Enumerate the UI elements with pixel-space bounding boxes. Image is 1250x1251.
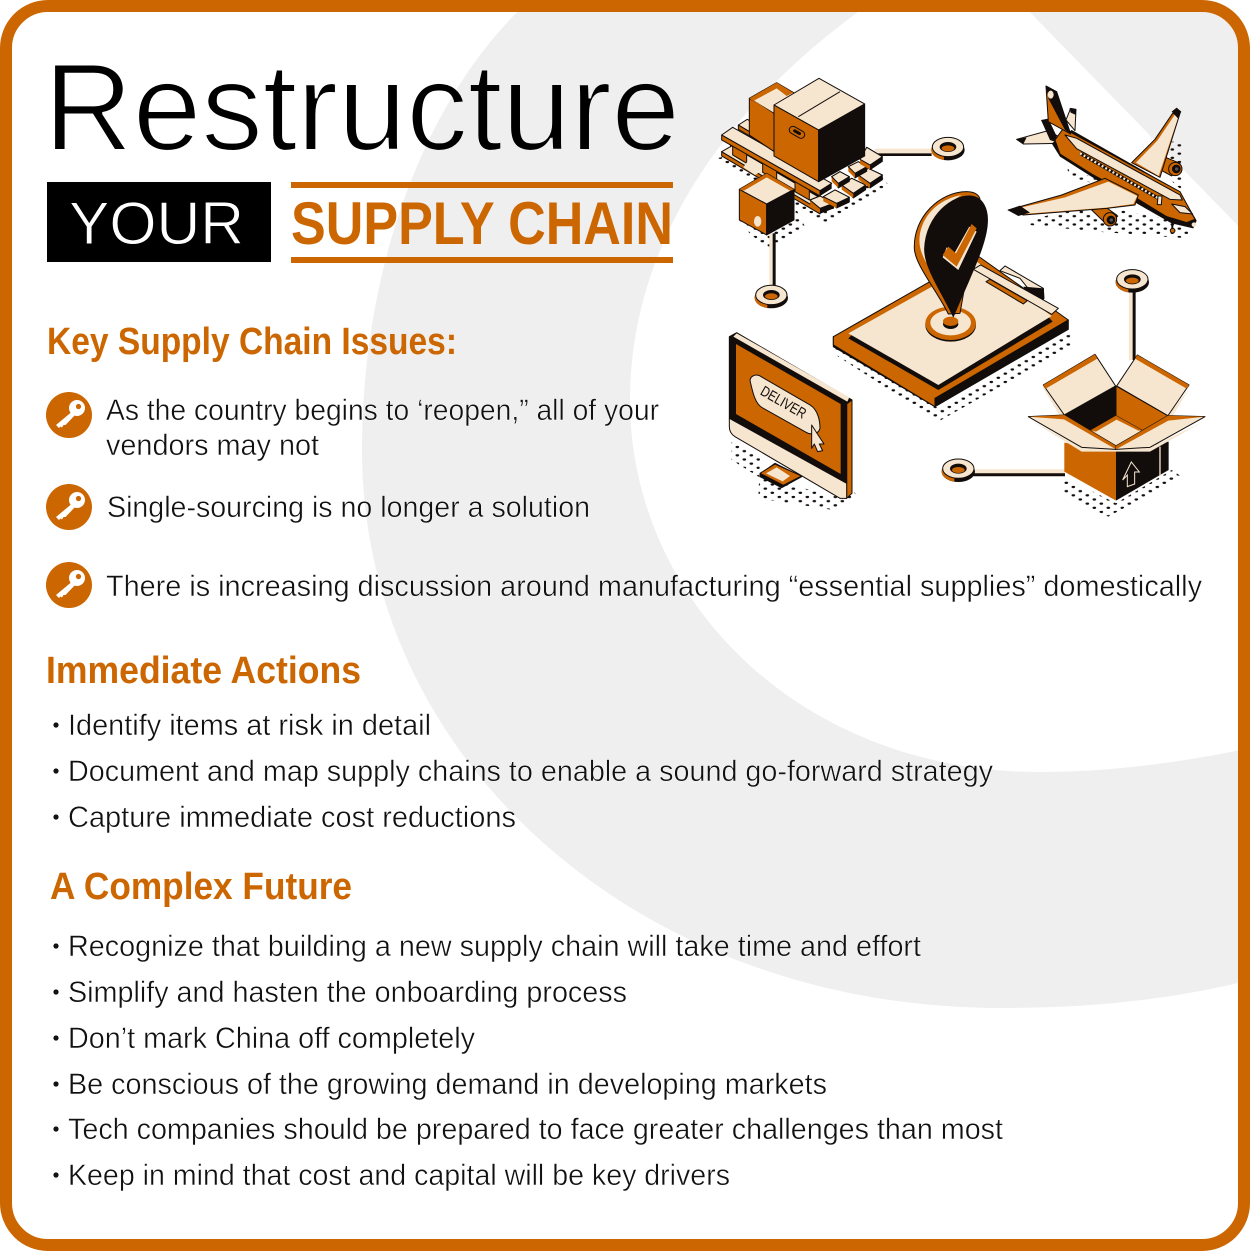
box interior xyxy=(1090,416,1143,446)
heading: Immediate Actions: Immediate Actions xyxy=(46,650,361,692)
illustration: clipboard with location pin xyxy=(833,192,1073,422)
flaps xyxy=(1043,385,1189,423)
near engine xyxy=(1092,207,1117,226)
issue 1: vendors may not xyxy=(106,429,320,462)
subtitle: SUPPLY CHAIN: SUPPLY CHAIN xyxy=(291,190,673,257)
tail fin xyxy=(1046,86,1071,134)
list: a complex future: Simplify and hasten the onboarding process xyxy=(68,976,627,1009)
heading: Key Supply Chain Issues: Key Supply Chain Issues: xyxy=(47,321,457,363)
pallet xyxy=(722,119,882,214)
issue 2: Single-sourcing is no longer a solution xyxy=(107,491,590,524)
background ring shape xyxy=(362,0,1250,1008)
issue 2 xyxy=(46,484,590,530)
subtitle badge: YOUR: YOUR xyxy=(69,190,244,257)
illustration: computer monitor with deliver button xyxy=(729,333,857,510)
title: Restructure xyxy=(44,39,680,177)
heading: A Complex Future: A Complex Future xyxy=(50,866,352,908)
small far tail fin xyxy=(1066,108,1076,131)
small box xyxy=(739,173,794,235)
issue 3 xyxy=(46,562,1202,608)
list: a complex future: Be conscious of the growing demand in developing markets xyxy=(68,1068,827,1101)
list: a complex future: Tech companies should be prepared to face greater challenges than most xyxy=(68,1113,1004,1146)
cursor xyxy=(812,425,824,452)
location ring xyxy=(925,307,976,342)
list: a complex future: Recognize that building a new supply chain will take time and effort xyxy=(68,930,922,963)
far engine xyxy=(1159,157,1182,176)
list: immediate actions: Document and map supply chains to enable a sound go-forward strategy xyxy=(68,755,993,788)
deliver button xyxy=(750,375,820,434)
subtitle badge: YOUR xyxy=(47,182,271,262)
stand xyxy=(760,463,802,488)
list: a complex future: Keep in mind that cost and capital will be key drivers xyxy=(68,1159,730,1192)
illustration: open cardboard box xyxy=(942,270,1205,517)
board xyxy=(833,320,1068,407)
icon: key xyxy=(46,484,92,530)
illustration: airplane xyxy=(1007,86,1197,238)
list: immediate actions: Capture immediate cost reductions xyxy=(68,801,516,834)
issue 1: As the country begins to ‘reopen,” all of your xyxy=(106,394,659,427)
front box xyxy=(774,78,865,182)
issue 3: There is increasing discussion around manufacturing “essential supplies” domestically xyxy=(106,570,1202,603)
issue 1 xyxy=(46,392,659,462)
box faces xyxy=(1064,443,1116,501)
right deck slats xyxy=(810,196,833,213)
list: a complex future: Don’t mark China off completely xyxy=(68,1022,475,1055)
list: immediate actions: Identify items at risk in detail xyxy=(68,709,431,742)
pin xyxy=(914,192,987,317)
icon: key xyxy=(46,392,92,438)
fuselage xyxy=(1052,128,1197,228)
deliver button: DELIVER xyxy=(757,384,809,422)
near wing xyxy=(1008,178,1138,215)
front top plank xyxy=(722,135,820,196)
monitor body xyxy=(847,400,852,498)
back plank xyxy=(738,125,777,152)
icon: key xyxy=(46,562,92,608)
list: immediate actions xyxy=(53,709,993,834)
stabilizer xyxy=(1017,131,1060,144)
clip xyxy=(973,265,1058,314)
illustration: pallet with boxes xyxy=(717,78,965,308)
far wing xyxy=(1132,113,1180,177)
list: a complex future xyxy=(53,930,1004,1192)
back box xyxy=(749,83,805,153)
